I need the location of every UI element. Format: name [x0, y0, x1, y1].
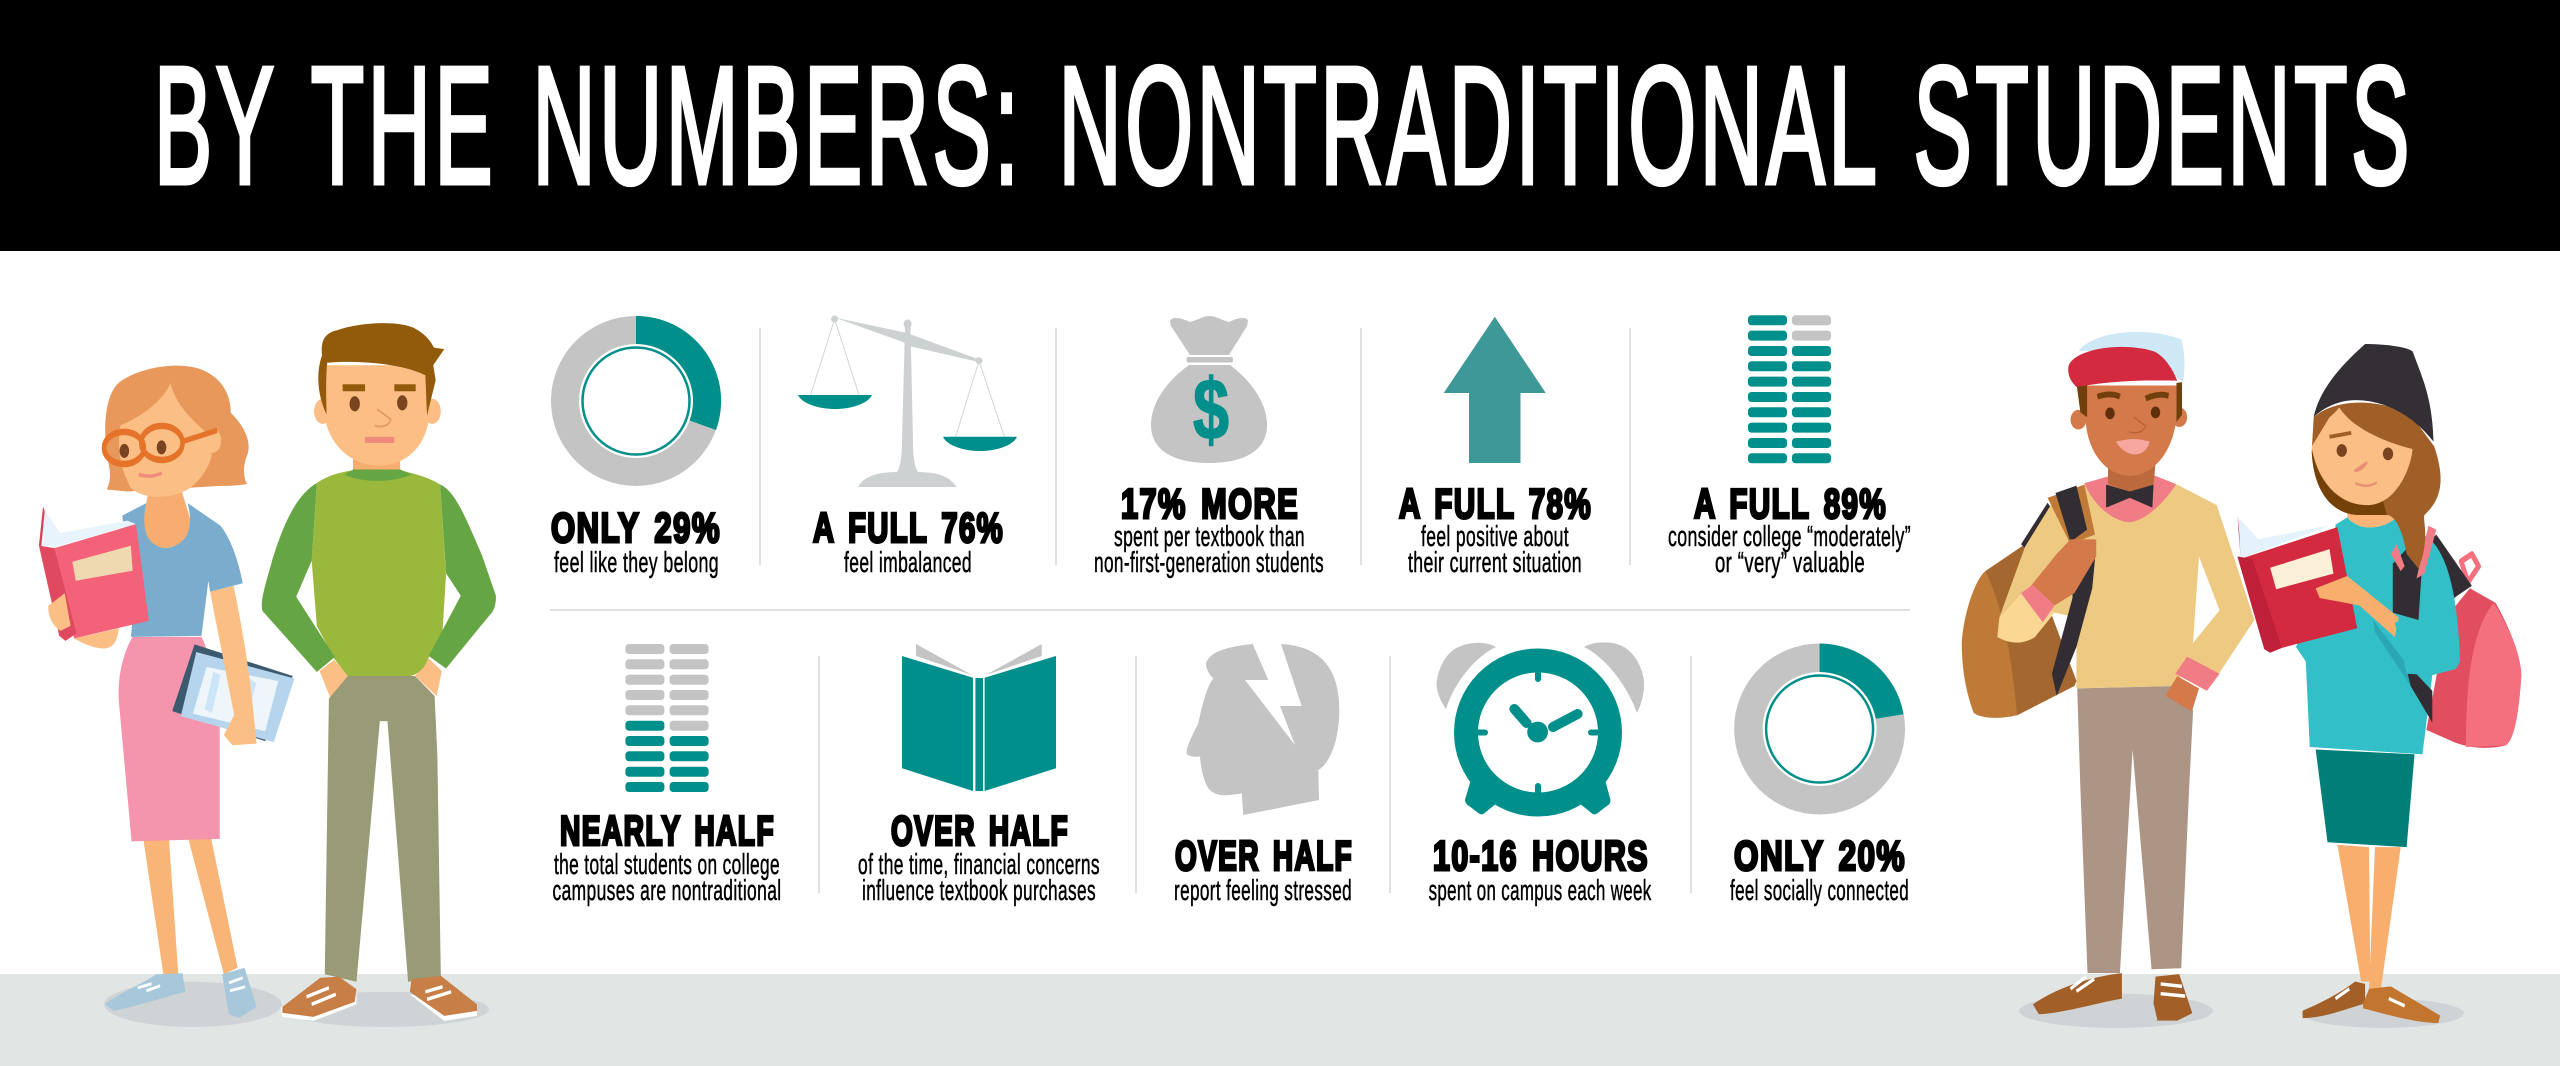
title banner	[0, 0, 2560, 251]
heading: A FULL 89%	[1694, 480, 1887, 527]
caption	[858, 849, 1100, 907]
panel: nearly half	[552, 644, 782, 907]
icon: bar stack nearly half	[625, 644, 709, 792]
heading: A FULL 78%	[1399, 480, 1592, 527]
heading: ONLY 29%	[551, 504, 721, 551]
caption: non-first-generation students	[1094, 547, 1324, 579]
caption: consider college “moderately”	[1668, 521, 1911, 553]
icon: head with lightning bolt	[1187, 644, 1339, 815]
caption: feel positive about	[1421, 521, 1569, 553]
heading: NEARLY HALF	[560, 807, 775, 854]
icon: donut 29%	[565, 316, 721, 472]
heading: ONLY 20%	[1734, 832, 1906, 879]
panel: only 29%	[551, 316, 721, 579]
panel: only 20%	[1730, 644, 1909, 907]
caption	[1094, 521, 1324, 579]
caption: or “very” valuable	[1715, 547, 1865, 579]
icon: scales	[798, 316, 1017, 487]
heading: A FULL 76%	[813, 504, 1004, 551]
caption: influence textbook purchases	[862, 875, 1096, 907]
caption: of the time, financial concerns	[858, 849, 1100, 881]
caption: spent per textbook than	[1114, 521, 1305, 553]
icon: money bag: $	[1193, 362, 1229, 458]
icon: open book	[902, 644, 1056, 791]
icon: money bag	[1151, 316, 1267, 463]
illustration: woman reading with glasses	[39, 366, 294, 1027]
caption: report feeling stressed	[1174, 875, 1352, 907]
illustration: woman with beanie and backpack	[2237, 344, 2521, 1028]
caption	[552, 849, 782, 907]
icon: bar stack 89%	[1748, 315, 1831, 463]
caption	[1668, 521, 1911, 579]
heading: OVER HALF	[1175, 832, 1353, 879]
icon: alarm clock	[1437, 642, 1644, 814]
caption: feel like they belong	[554, 547, 719, 579]
panel: 10-16 hours	[1429, 642, 1652, 907]
illustration: man with backpack and cap	[1962, 332, 2254, 1028]
heading: 17% MORE	[1121, 480, 1299, 527]
heading: OVER HALF	[891, 807, 1069, 854]
caption: feel socially connected	[1730, 875, 1909, 907]
panel: over half textbook	[858, 644, 1100, 907]
panel: 17% more	[1094, 316, 1324, 579]
panel: over half stressed	[1174, 644, 1353, 907]
icon: donut 20%	[1748, 644, 1904, 800]
heading: 10-16 HOURS	[1433, 832, 1649, 879]
panel: a full 78%	[1399, 317, 1592, 579]
illustration: man in green sweater	[262, 323, 496, 1027]
panel: a full 76%	[798, 316, 1017, 579]
caption: spent on campus each week	[1429, 875, 1652, 907]
caption: feel imbalanced	[844, 547, 972, 579]
icon: up arrow	[1444, 317, 1546, 463]
caption: the total students on college	[554, 849, 780, 881]
caption: campuses are nontraditional	[552, 875, 782, 907]
caption: their current situation	[1408, 547, 1582, 579]
panel: a full 89%	[1668, 315, 1911, 579]
caption	[1408, 521, 1582, 579]
